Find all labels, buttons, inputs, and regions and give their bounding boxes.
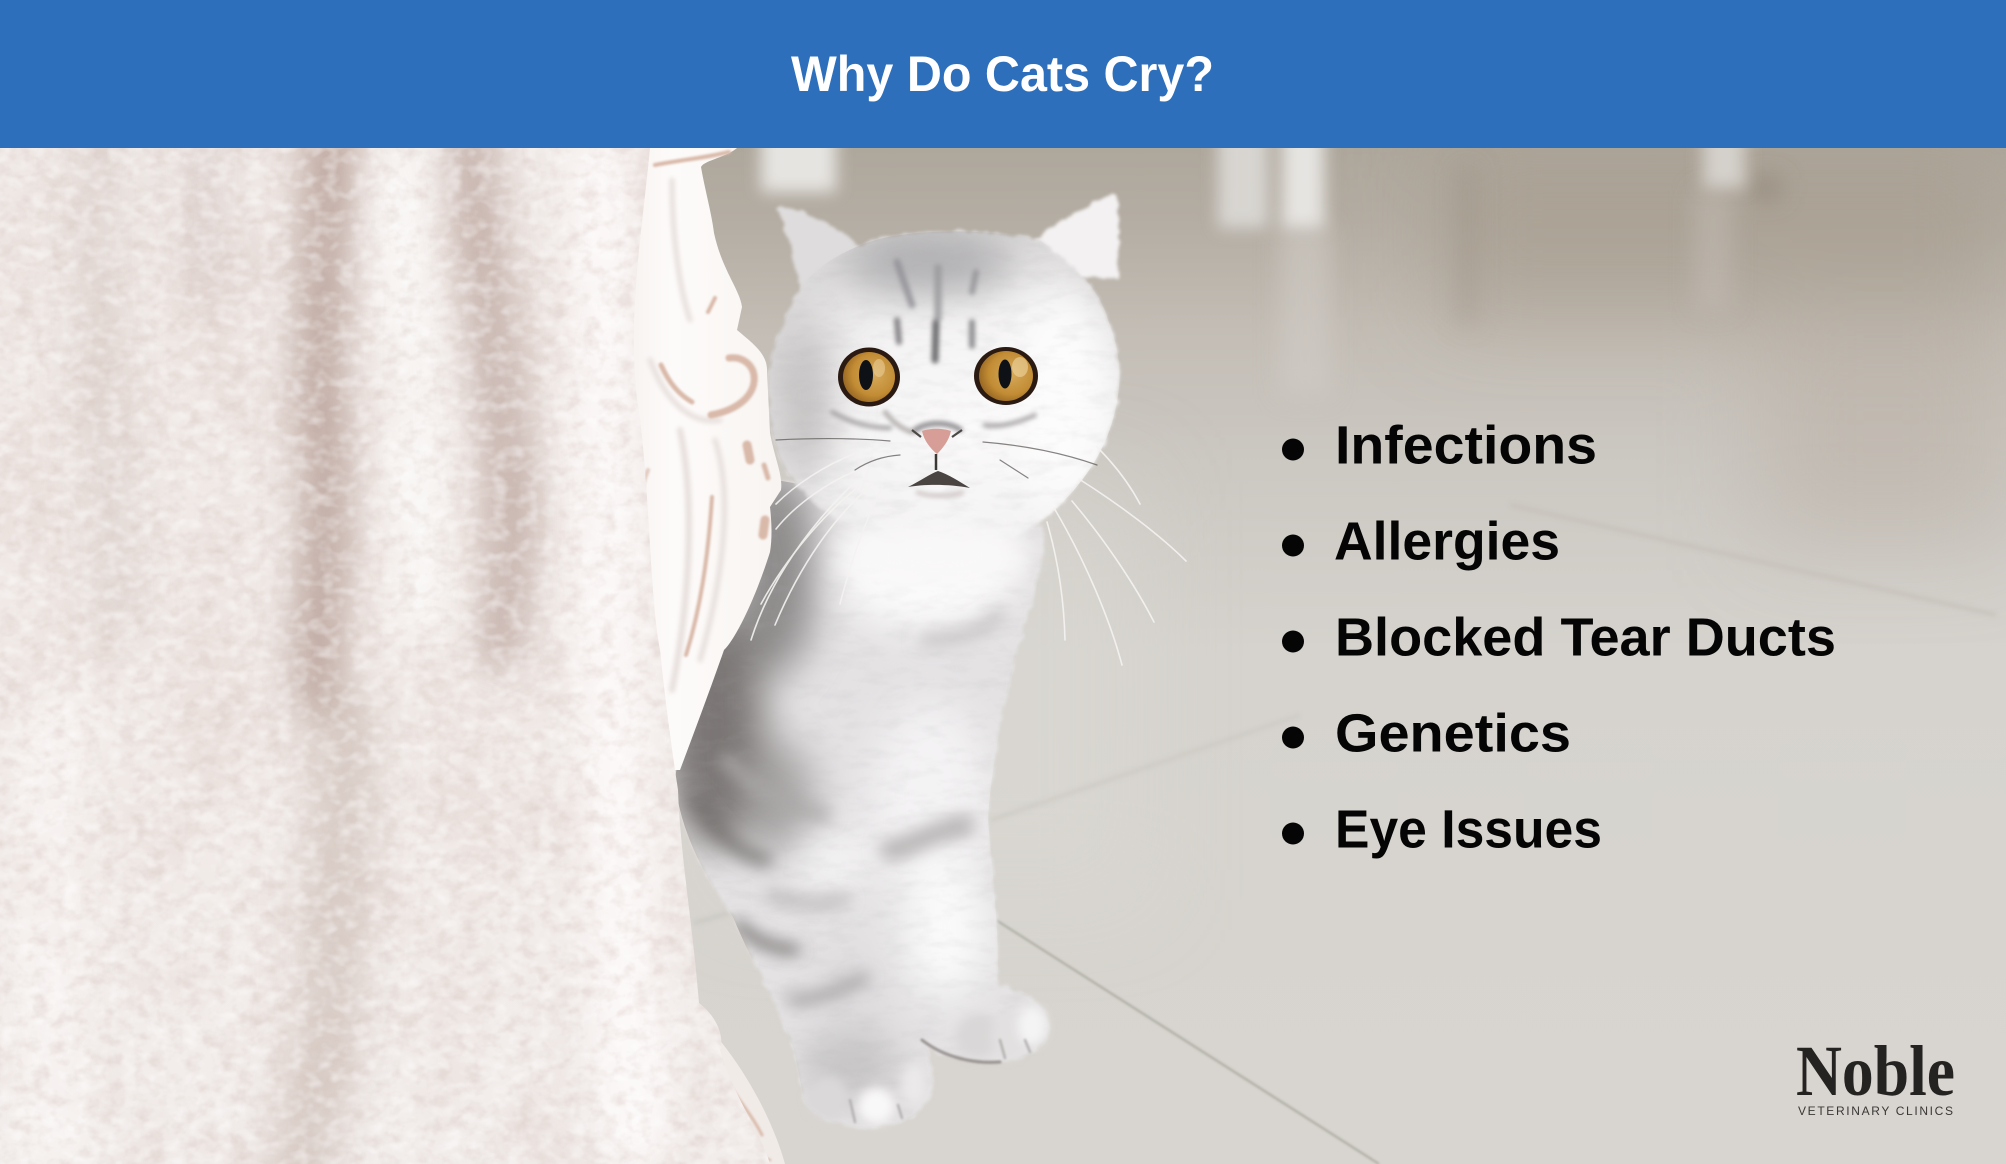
carving shadows bbox=[650, 180, 724, 690]
blanket fur texture bbox=[0, 148, 800, 1164]
cat eyes bbox=[838, 347, 1038, 406]
list item: Blocked Tear Ducts: Blocked Tear Ducts bbox=[1335, 608, 1836, 668]
cat head bbox=[767, 228, 1122, 565]
fluffy pink-white blanket bbox=[0, 140, 800, 1164]
cat ears bbox=[776, 192, 1120, 300]
cat nose and mouth bbox=[908, 424, 970, 496]
logo: Noble Veterinary Clinics: Noble bbox=[1796, 1031, 1955, 1111]
under-eye markings bbox=[832, 412, 1035, 428]
list item: Allergies: Allergies bbox=[1334, 512, 1560, 572]
header banner bbox=[0, 0, 2006, 148]
logo: Noble Veterinary Clinics: VETERINARY CLINICS bbox=[1798, 1104, 1953, 1118]
forehead stripes bbox=[897, 262, 976, 360]
cat whiskers bbox=[751, 439, 1186, 665]
list item: Infections: Infections bbox=[1335, 416, 1597, 476]
cat bbox=[660, 192, 1186, 1140]
cat paws bbox=[808, 1006, 1046, 1124]
floor tile seams bbox=[694, 505, 1996, 1164]
carved white table post bbox=[600, 148, 785, 1164]
list item: Eye Issues: Eye Issues bbox=[1335, 800, 1602, 860]
blanket mottling bbox=[0, 148, 692, 1164]
list item: Genetics: Genetics bbox=[1335, 704, 1571, 764]
blanket folds bbox=[97, 140, 511, 1164]
bullet list of causes bbox=[1282, 416, 1836, 860]
cat body and legs bbox=[660, 465, 1060, 1140]
worn paint chips bbox=[638, 152, 770, 1160]
paw shadow lines bbox=[850, 1040, 1030, 1122]
title: Why Do Cats Cry? bbox=[791, 46, 1214, 102]
chin blending into chest bbox=[840, 523, 1030, 587]
